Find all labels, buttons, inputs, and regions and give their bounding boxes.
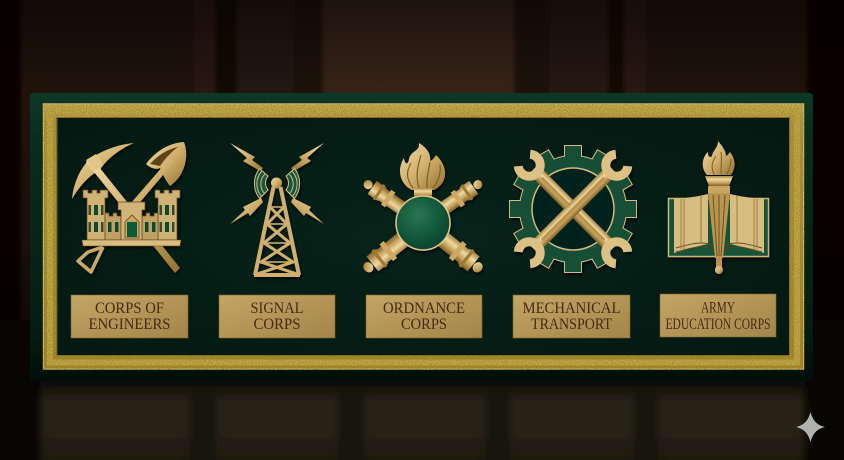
polished table surface <box>0 320 844 460</box>
plaque: signal corps: SIGNAL <box>250 300 304 317</box>
icon: ordnance corps crossed cannons and flaming grenade <box>358 143 488 279</box>
plaque: ordnance corps: CORPS <box>401 316 447 333</box>
plaque: ordnance corps <box>366 295 482 338</box>
gold braided frame <box>44 104 804 369</box>
plaque: signal corps <box>219 295 335 338</box>
icon: mechanical transport gear and crossed wrenches <box>510 146 636 272</box>
plaque: army education corps: EDUCATION CORPS <box>666 316 770 333</box>
plaque: signal corps: CORPS <box>254 316 300 333</box>
plaque: army education corps: ARMY <box>701 300 735 316</box>
plaque: ordnance corps: ORDNANCE <box>383 300 465 317</box>
wood wall background <box>0 0 844 325</box>
plaque: mechanical transport: MECHANICAL <box>522 300 620 317</box>
plaque: corps of engineers <box>71 295 188 338</box>
velvet plaque panel <box>30 93 813 381</box>
plaque: corps of engineers: CORPS OF <box>95 300 164 317</box>
plaque: army education corps <box>660 294 776 337</box>
icon: signal corps tower with lightning bolts <box>230 143 324 275</box>
plaque: mechanical transport: TRANSPORT <box>531 316 612 333</box>
icon: army education corps torch and open book <box>668 141 768 274</box>
icon: corps of engineers castle with pick and shovel <box>72 142 186 273</box>
icon: sparkle watermark <box>796 412 825 442</box>
plaque: mechanical transport <box>513 295 630 338</box>
plaque: corps of engineers: ENGINEERS <box>88 316 170 333</box>
